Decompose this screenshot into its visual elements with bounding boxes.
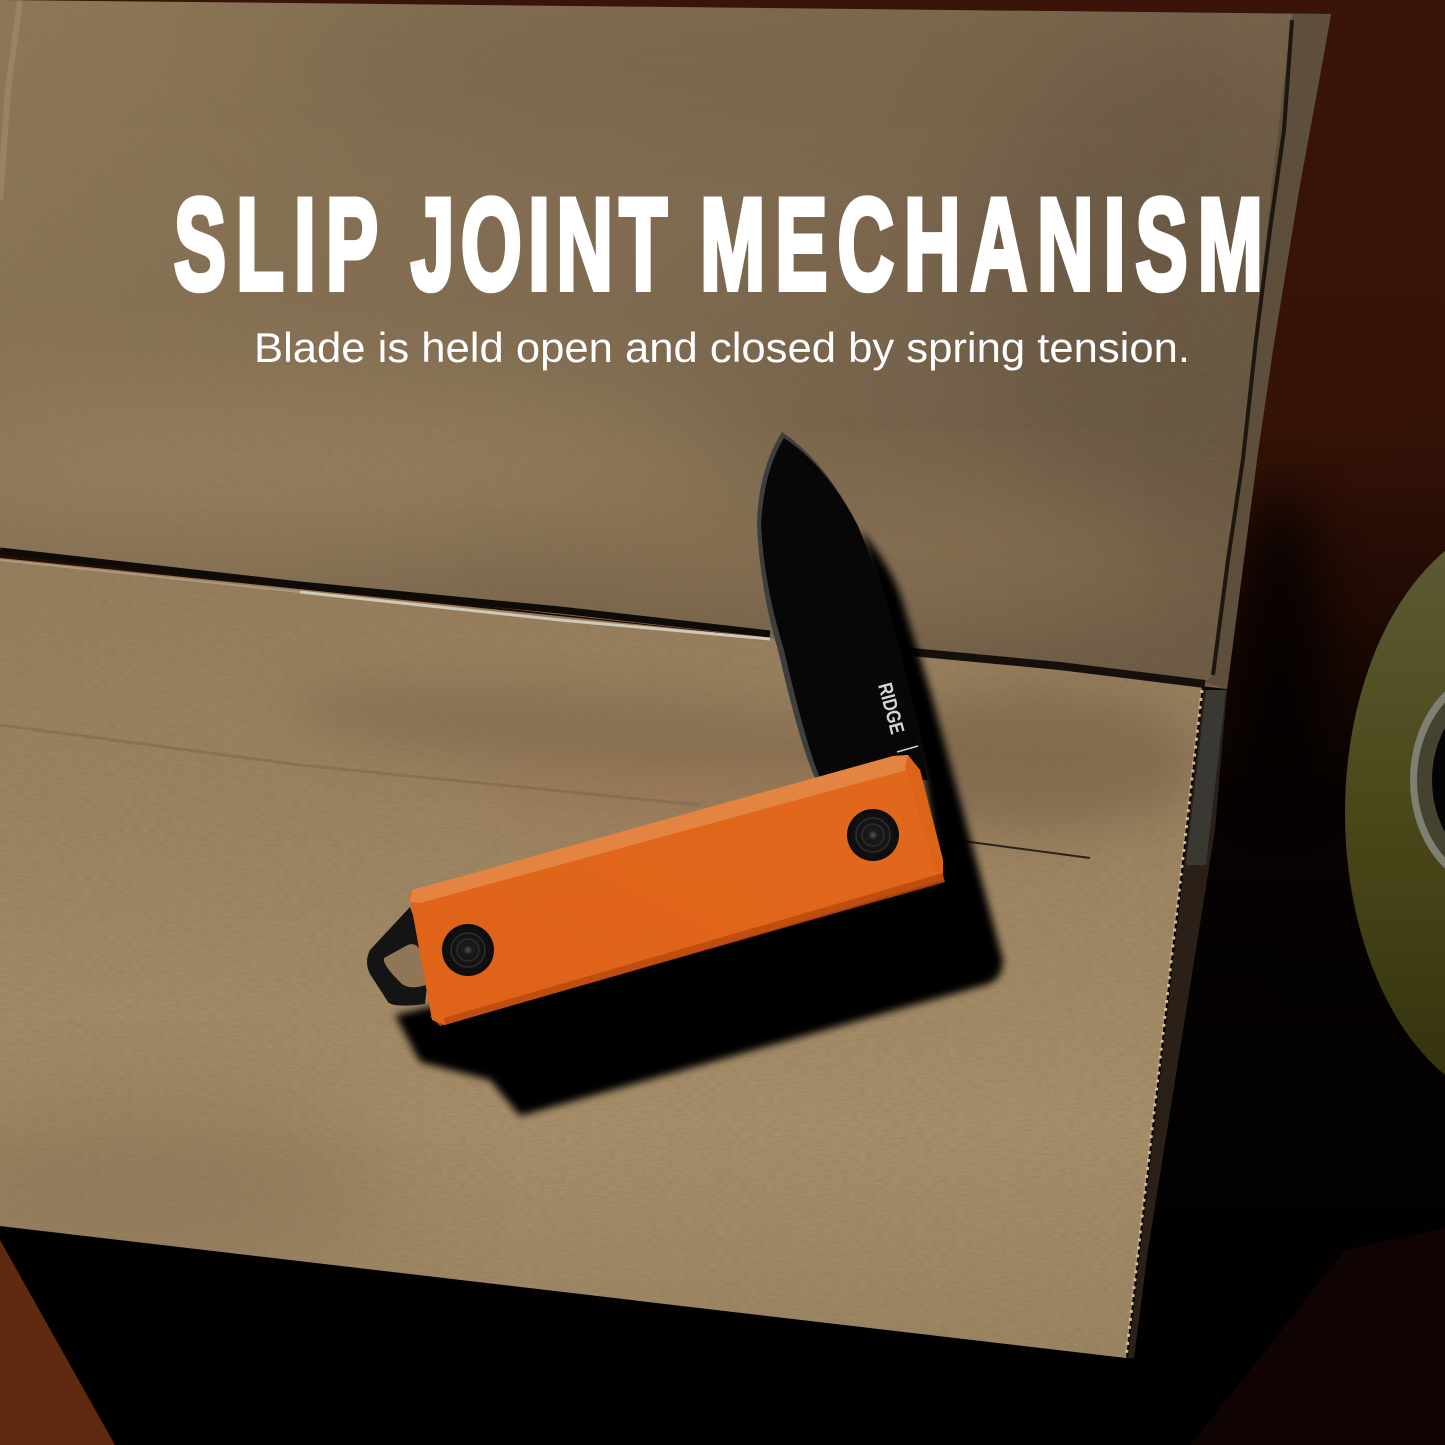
title: JOINT bbox=[411, 171, 674, 317]
box cast shadow on table bbox=[1235, 490, 1325, 810]
wood corner bottom left bbox=[0, 1240, 115, 1445]
title: SLIP bbox=[174, 171, 388, 317]
upper flap edge strip bbox=[1205, 14, 1331, 689]
lower flap side strip bbox=[1128, 690, 1227, 1358]
seam crack between flaps bbox=[0, 551, 1205, 684]
blade logo: RIDGE bbox=[873, 681, 908, 737]
wood plank bottom right bbox=[1190, 1228, 1445, 1445]
subtitle: Blade is held open and closed by spring tension. bbox=[254, 324, 1190, 371]
tape roll bbox=[1345, 518, 1445, 1108]
blade bbox=[757, 432, 928, 780]
handle bottom edge bbox=[444, 873, 943, 1025]
handle right bevel bbox=[905, 755, 943, 876]
screw right bbox=[847, 809, 899, 861]
serrated lower edge bbox=[1126, 690, 1202, 1358]
handle bbox=[409, 755, 945, 1026]
knife shadow bbox=[395, 530, 1003, 1116]
handle top bevel bbox=[410, 755, 914, 903]
lower cardboard flap bbox=[0, 550, 1210, 1370]
keyring loop bbox=[367, 907, 430, 1006]
upper cardboard flap bbox=[0, 0, 1340, 700]
upper part of side strip, lit bbox=[1186, 690, 1226, 865]
screw left bbox=[442, 924, 494, 976]
title: MECHANISM bbox=[700, 171, 1273, 317]
knife bbox=[367, 432, 945, 1026]
